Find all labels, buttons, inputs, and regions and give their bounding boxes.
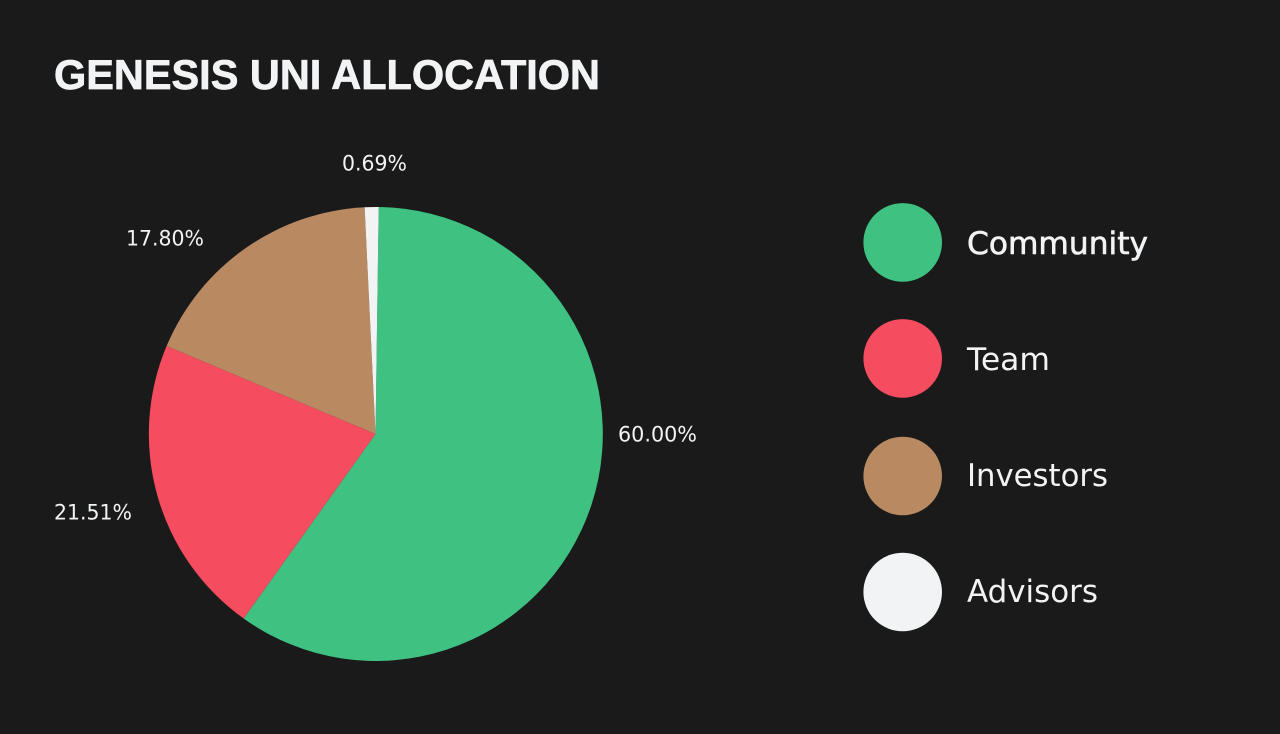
legend bbox=[863, 203, 1148, 631]
legend item: advisors: Advisors bbox=[967, 574, 1098, 610]
legend item: team bbox=[863, 319, 1050, 398]
legend item: advisors bbox=[863, 553, 1098, 631]
legend item: investors bbox=[863, 437, 1108, 515]
pie label: investors: 17.80% bbox=[126, 226, 204, 250]
pie label: community: 60.00% bbox=[618, 422, 697, 446]
legend item: team: Team bbox=[966, 342, 1050, 378]
slice: advisors 0.69% bbox=[365, 207, 379, 434]
slice: team 21.51% bbox=[149, 346, 376, 618]
slice: community 60.00% bbox=[244, 207, 603, 661]
pie label: team: 21.51% bbox=[54, 500, 132, 524]
slice: investors 17.80% bbox=[167, 207, 376, 434]
legend item: investors: Investors bbox=[967, 458, 1108, 494]
title: GENESIS UNI ALLOCATION bbox=[54, 51, 600, 98]
legend item: community bbox=[863, 203, 1148, 282]
pie label: advisors: 0.69% bbox=[342, 152, 407, 176]
pie chart bbox=[149, 207, 603, 661]
legend item: community: Community bbox=[967, 226, 1148, 262]
